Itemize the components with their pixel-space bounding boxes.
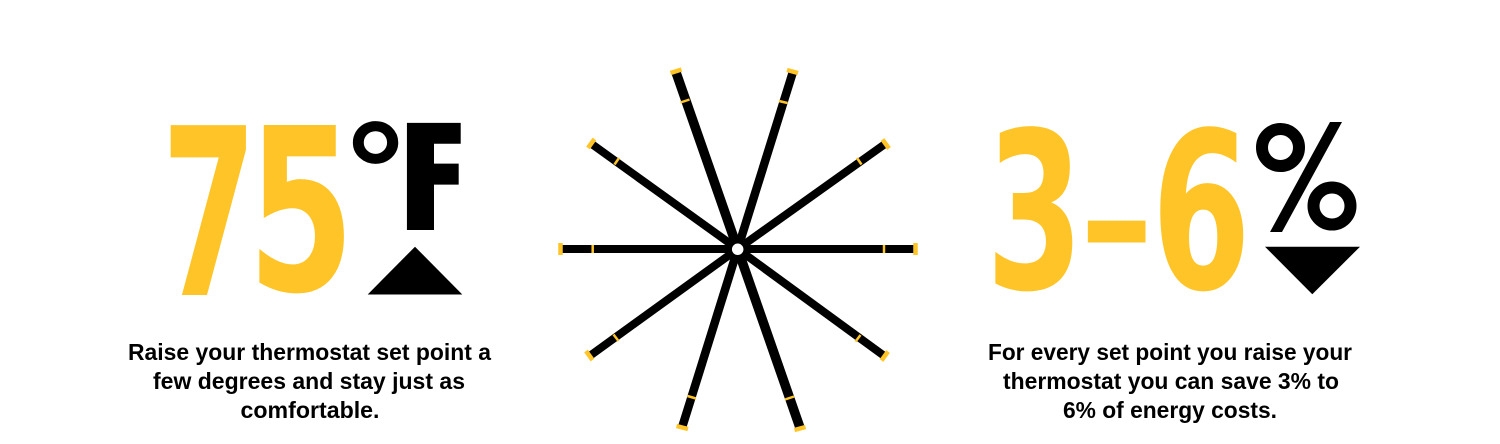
number: 75 <box>162 80 355 351</box>
number: 3-6: - <box>1079 113 1155 318</box>
spokes <box>560 72 916 428</box>
text: raise description <box>128 339 491 423</box>
centre hub <box>730 242 745 257</box>
panel: raise set point <box>128 80 491 423</box>
text: raise description: comfortable. <box>240 397 380 423</box>
text: raise description: few degrees and stay just as <box>153 368 465 394</box>
panel: energy savings <box>990 122 1360 423</box>
yellow tick marks <box>593 100 884 400</box>
number: 3-6 <box>986 86 1251 341</box>
yellow end caps <box>560 70 916 430</box>
icon: up triangle <box>368 247 462 294</box>
unit: F: F <box>397 95 470 266</box>
number: 75: 5 <box>248 80 355 344</box>
text: savings description: 6% of energy costs. <box>1063 397 1277 423</box>
text: savings description <box>988 339 1352 423</box>
number: 75: 7 <box>162 80 257 351</box>
icon: central starburst of spokes <box>560 70 916 430</box>
text: savings description: thermostat you can save 3% to <box>1003 368 1339 394</box>
unit: degree sign: ° <box>346 93 404 248</box>
unit: percent sign: % <box>1239 94 1372 268</box>
number: 3-6: 6 <box>1151 86 1251 340</box>
stat: 75 degrees F <box>162 80 470 351</box>
unit: percent sign <box>1256 122 1356 232</box>
text: raise description: Raise your thermostat set point a <box>128 339 491 365</box>
number: 3-6: 3 <box>986 87 1083 341</box>
stat: 3-6 percent <box>995 122 1356 292</box>
text: savings description: For every set point you raise your <box>988 339 1352 365</box>
icon: down triangle <box>1265 247 1360 294</box>
infographic canvas <box>130 67 1360 432</box>
